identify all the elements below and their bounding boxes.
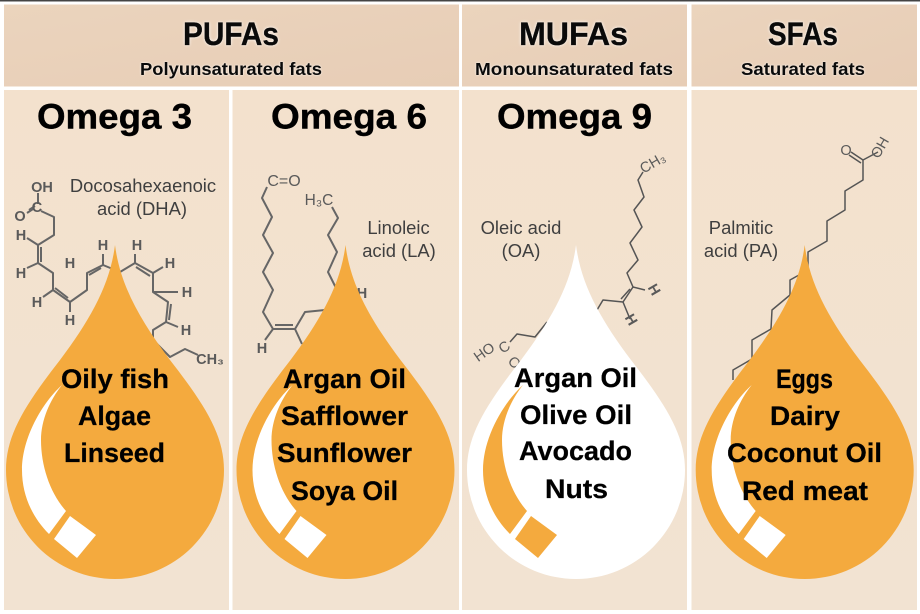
food list: Omega 6: Argan Oil (283, 364, 406, 394)
heading: SFAs: SFAs (768, 16, 838, 52)
molecule: LA (257, 173, 367, 357)
food list: Omega 3 (61, 364, 169, 468)
food list: Omega 9: Nuts (545, 474, 608, 504)
food list: Omega 9: Olive Oil (520, 400, 632, 430)
molecule: DHA (14, 180, 224, 368)
food list: Omega 9: Argan Oil (514, 363, 637, 393)
food list: Omega 6: Sunflower (277, 438, 412, 468)
food list: Omega 6: Soya Oil (291, 476, 398, 506)
panel: Omega 3 (4, 90, 229, 610)
heading: Omega 3: Omega 3 (37, 98, 192, 136)
label: Oleic acid (481, 217, 561, 261)
molecule: DHA: H (132, 238, 142, 254)
heading: Omega 6: Omega 6 (271, 98, 427, 136)
food list: Omega 3: Algae (78, 401, 151, 431)
label: Palmitic acid: acid (PA) (704, 240, 778, 261)
food list: SFAs: Coconut Oil (727, 438, 882, 468)
molecule: DHA: H (16, 266, 26, 282)
oil drop: SFAs (696, 245, 914, 579)
molecule: OA (471, 150, 669, 373)
heading: MUFAs: MUFAs (519, 16, 628, 52)
food list: Omega 6 (277, 364, 412, 506)
food list: SFAs: Eggs (776, 364, 833, 394)
molecule: DHA: O (14, 209, 26, 225)
molecule: DHA: H (182, 285, 192, 301)
food list: Omega 9: Avocado (519, 436, 632, 466)
panel: SFAs (692, 90, 917, 610)
molecule: DHA: C (32, 200, 43, 216)
molecule: PA: OH (868, 135, 893, 161)
label: Linoleic acid (362, 217, 436, 261)
molecule: OA: C (496, 338, 514, 357)
molecule: PA (733, 135, 893, 380)
panel: Omega 6 (232, 90, 459, 610)
label: Oleic acid: Oleic acid (481, 217, 561, 238)
molecule: OA: H (644, 281, 663, 299)
food list: Omega 9 (514, 363, 637, 504)
label: Palmitic acid: Palmitic (709, 217, 773, 238)
heading: PUFAs: PUFAs (183, 16, 279, 52)
food list: Omega 3: Linseed (64, 438, 165, 468)
panel: SFAs header (692, 4, 917, 86)
label: Docosahexaenoic acid (70, 175, 216, 219)
molecule: OA: O (504, 354, 523, 373)
label: Palmitic acid (704, 217, 778, 261)
molecule: PA: O (840, 143, 852, 159)
food list: Omega 6: Safflower (281, 401, 409, 431)
food list: SFAs: Dairy (770, 401, 840, 431)
molecule: OA: CH₃ (637, 150, 669, 177)
heading: Omega 9: Omega 9 (497, 98, 652, 136)
molecule: OA: H (621, 311, 640, 329)
molecule: DHA: H (165, 256, 175, 272)
subheading: Monounsaturated fats: Monounsaturated fats (475, 59, 673, 79)
molecule: DHA: H (65, 256, 75, 272)
subheading: Saturated fats: Saturated fats (741, 59, 865, 79)
food list: Omega 3: Oily fish (61, 364, 169, 394)
molecule: LA: C=O (267, 173, 301, 190)
molecule: DHA: H (65, 313, 75, 329)
food list: SFAs (727, 364, 882, 506)
molecule: DHA: CH₃ (196, 352, 224, 368)
panel: Omega 9 (462, 90, 687, 610)
panel: MUFAs header (462, 4, 687, 86)
molecule: LA: H (357, 286, 367, 302)
label: Oleic acid: (OA) (502, 240, 540, 261)
molecule: DHA: H (16, 228, 26, 244)
panel: PUFAs header (4, 4, 459, 86)
label: Linoleic acid: Linoleic (367, 217, 430, 238)
molecule: DHA: H (32, 295, 42, 311)
molecule: DHA: H (181, 323, 191, 339)
subheading: Polyunsaturated fats: Polyunsaturated fats (140, 59, 322, 79)
molecule: LA: H₃C (305, 192, 333, 209)
food list: SFAs: Red meat (742, 476, 868, 506)
oil drop: Omega 3 (6, 245, 224, 579)
molecule: LA: H (257, 341, 267, 357)
molecule: DHA: OH (31, 180, 53, 196)
label: Linoleic acid: acid (LA) (362, 240, 436, 261)
label: Docosahexaenoic acid: acid (DHA) (97, 198, 187, 219)
oil drop: Omega 6 (236, 245, 454, 579)
molecule: DHA: H (98, 238, 108, 254)
oil drop: Omega 9 (467, 245, 685, 579)
label: Docosahexaenoic acid: Docosahexaenoic (70, 175, 216, 196)
molecule: OA: HO (471, 340, 498, 366)
